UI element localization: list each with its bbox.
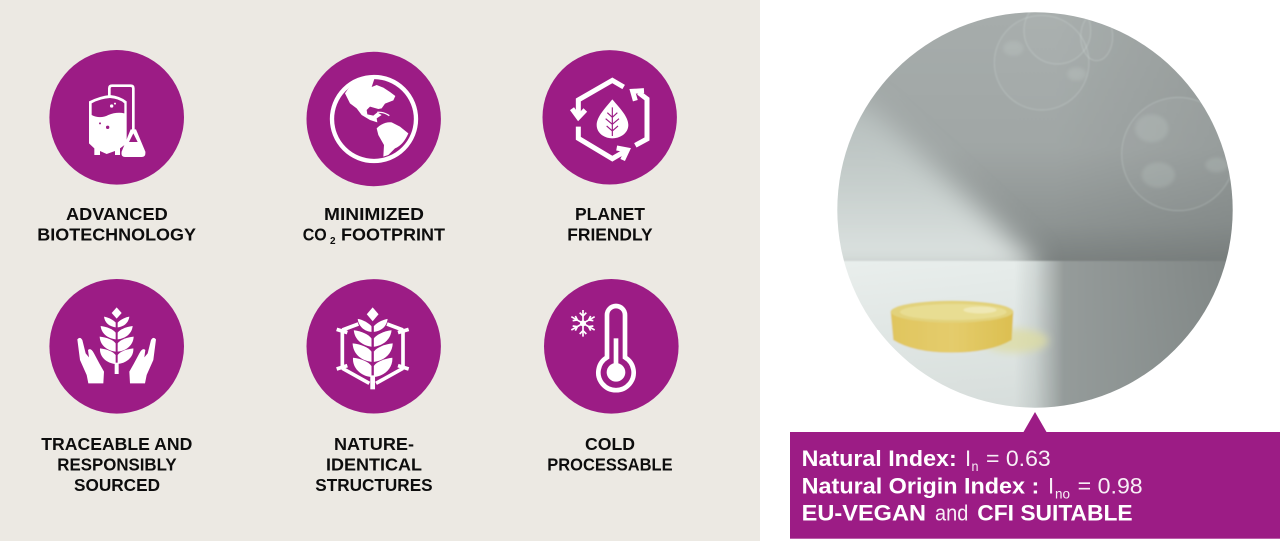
label: minimized CO2 footprint: MINIMIZED xyxy=(324,204,424,224)
natural index line: I xyxy=(965,446,971,471)
callout: index values banner xyxy=(790,412,1280,539)
icon: globe xyxy=(306,52,441,186)
label: advanced biotechnology: BIOTECHNOLOGY xyxy=(37,225,196,245)
benefit: advanced biotechnology xyxy=(37,50,196,245)
label: planet friendly xyxy=(567,204,653,245)
label: traceable and responsibly sourced: SOURCED xyxy=(74,475,160,495)
natural origin index line: Natural Origin Index : xyxy=(802,473,1039,498)
natural index line: n xyxy=(972,458,978,474)
label: minimized CO2 footprint: CO xyxy=(303,225,327,245)
certifications line: and xyxy=(935,501,968,526)
icon: fermentation tank and flask xyxy=(49,50,184,185)
label: planet friendly: FRIENDLY xyxy=(567,225,653,245)
photo: yellow gel disc and soap bubbles in a circle xyxy=(837,12,1233,408)
natural origin index line xyxy=(802,473,1143,502)
icon: thermometer and snowflake xyxy=(544,279,679,414)
disc xyxy=(982,329,1048,353)
benefit: traceable and responsibly sourced xyxy=(41,279,192,495)
benefit: minimized CO2 footprint xyxy=(303,52,445,247)
natural index line: Natural Index: xyxy=(802,446,957,471)
label: cold processable xyxy=(547,434,673,475)
label: minimized CO2 footprint: 2 xyxy=(330,236,336,247)
label: cold processable: COLD xyxy=(585,434,635,454)
label: nature-identical structures xyxy=(315,434,433,495)
icon: wheat in molecular hexagon xyxy=(306,279,441,413)
certifications line: CFI SUITABLE xyxy=(977,501,1133,526)
benefit: nature-identical structures xyxy=(306,279,441,495)
icon: recycling hexagon with leaf xyxy=(542,50,677,184)
label: advanced biotechnology xyxy=(37,204,196,245)
label: advanced biotechnology: ADVANCED xyxy=(66,204,168,224)
benefit: cold processable xyxy=(544,279,679,475)
label: traceable and responsibly sourced xyxy=(41,434,192,495)
panel: benefits background xyxy=(0,0,760,541)
label: traceable and responsibly sourced: TRACEABLE AND xyxy=(41,434,192,454)
label: minimized CO2 footprint: FOOTPRINT xyxy=(341,225,445,245)
certifications line: EU-VEGAN xyxy=(802,501,926,526)
label: nature-identical structures: IDENTICAL xyxy=(326,455,422,475)
certifications line xyxy=(802,501,1133,526)
label: cold processable: PROCESSABLE xyxy=(547,455,673,475)
natural origin index line: I xyxy=(1048,473,1054,498)
natural index line xyxy=(802,446,1051,474)
label: planet friendly: PLANET xyxy=(575,204,645,224)
bubbles xyxy=(994,0,1235,211)
natural origin index line: = 0.98 xyxy=(1078,473,1143,498)
natural index line: = 0.63 xyxy=(986,446,1051,471)
icon: hands holding wheat xyxy=(49,279,184,414)
benefit: planet friendly xyxy=(542,50,677,245)
label: nature-identical structures: STRUCTURES xyxy=(315,475,433,495)
natural origin index line: no xyxy=(1055,486,1070,502)
label: minimized CO2 footprint xyxy=(303,204,445,247)
label: traceable and responsibly sourced: RESPONSIBLY xyxy=(57,455,177,475)
callout pointer xyxy=(1024,412,1046,432)
label: nature-identical structures: NATURE- xyxy=(334,434,414,454)
